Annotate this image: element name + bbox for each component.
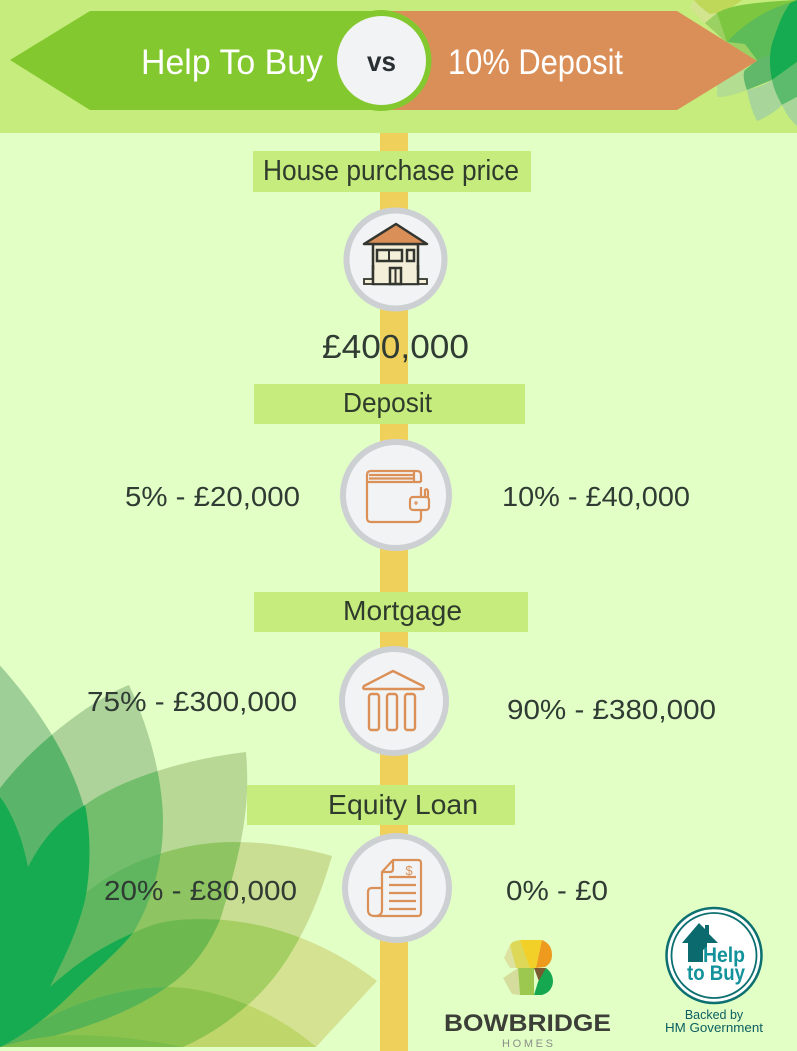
label: equity loan: Equity Loan [328,789,478,820]
logo: help to buy: HM Government [665,1021,764,1035]
logo: bowbridge homes: HOMES [502,1038,553,1050]
value: 10% deposit amount: 10% - £40,000 [502,481,690,512]
header band [0,0,797,133]
logo: help to buy [665,908,764,1035]
arrow: 10% deposit [380,11,757,110]
label: deposit: Deposit [343,387,432,418]
logo: bowbridge homes: BOWBRIDGE [444,1010,611,1037]
decoration: bottom left leaves [0,660,377,1047]
vs badge: vs [367,46,396,77]
logo: bowbridge homes [444,940,611,1050]
value: help to buy equity loan: 20% - £80,000 [104,875,297,906]
vs badge [330,10,432,111]
icon: document: $ [405,863,413,878]
arrow: help to buy [10,11,386,110]
icon: house [346,210,444,308]
icon: document [345,836,449,940]
icon: wallet [343,442,449,548]
label: house purchase price: House purchase price [263,155,519,187]
logo: help to buy: Help [703,944,745,967]
logo: help to buy: to Buy [687,962,745,985]
label: equity loan [247,785,515,825]
vertical timeline stripe [380,130,408,1051]
logo: help to buy: Backed by [685,1008,744,1022]
label: mortgage: Mortgage [343,595,462,626]
value: 10% deposit mortgage: 90% - £380,000 [507,694,716,725]
label: mortgage [254,592,528,632]
value: house price: £400,000 [322,328,469,365]
heading: help to buy: Help To Buy [141,43,323,82]
value: 10% deposit equity loan: 0% - £0 [506,875,608,906]
value: help to buy mortgage: 75% - £300,000 [87,686,297,717]
heading: 10% deposit: 10% Deposit [448,43,623,82]
decoration: top right leaves [690,0,797,126]
label: deposit [254,384,525,424]
value: help to buy deposit: 5% - £20,000 [125,481,300,512]
icon: bank [342,649,446,753]
